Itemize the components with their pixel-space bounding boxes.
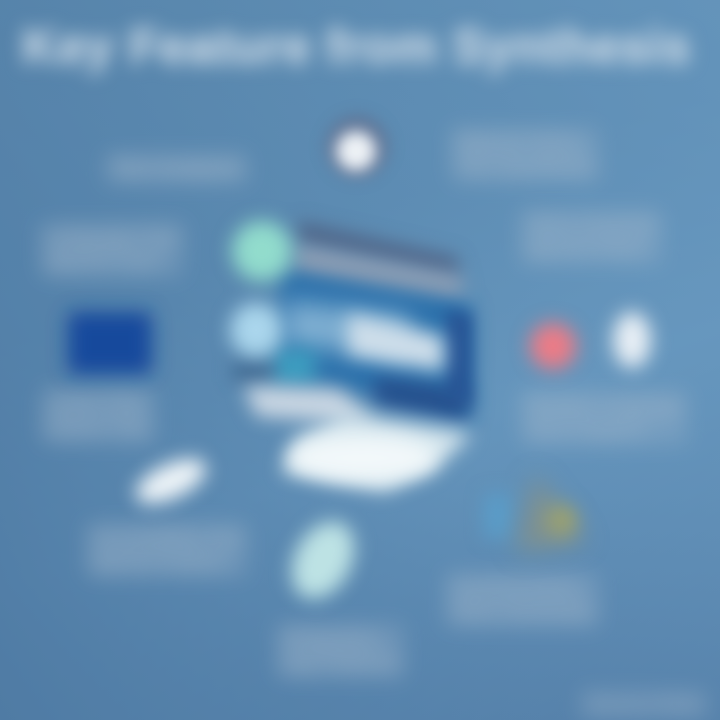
- text block: top centre left: Text Analysis: [110, 157, 243, 180]
- text block: middle right: Voice Support: [525, 420, 646, 440]
- text block: middle left: Export Tool: [46, 418, 150, 439]
- text block: lower left: [87, 523, 247, 577]
- monitor top edge: [298, 222, 458, 276]
- icon: white leaf: [129, 450, 213, 512]
- title: Key Feature from Synthesis: [22, 20, 691, 74]
- icon: red circle: [530, 323, 576, 369]
- white base: [282, 414, 472, 492]
- text block: middle right: [521, 391, 687, 445]
- text block: upper right: [521, 210, 662, 264]
- monitor grey band: [295, 246, 462, 300]
- monitor dark right side: [375, 376, 468, 420]
- screen glow: [285, 300, 410, 358]
- icon: blue and olive shapes: [484, 474, 586, 552]
- text block: upper right: Speech Pitch: [525, 239, 644, 260]
- text block: top right: Text Synthesis: [455, 156, 595, 178]
- icon: white oval: [613, 312, 651, 368]
- text block: middle left: Audio Files: [46, 393, 148, 414]
- text block: lower centre: App Platform: [281, 653, 400, 674]
- icon: blue square: [68, 312, 152, 374]
- text block: upper left: Speech Tool: [45, 252, 157, 273]
- icon: mint leaf: [279, 511, 367, 609]
- text block: middle right: Multiple Language: [525, 395, 683, 415]
- light blue circle: [230, 303, 282, 357]
- text block: lower right: Customization: [450, 577, 581, 598]
- text block: lower right: [446, 573, 599, 627]
- teal accent: [273, 350, 315, 384]
- dark accent: [234, 360, 272, 382]
- text block: upper right: Voice Controls: [525, 214, 658, 235]
- icon: computer monitor: [230, 221, 472, 492]
- text block: lower left: Accessibility Tool: [91, 527, 243, 547]
- text block: bottom right: Source Note: [585, 693, 703, 715]
- text block: upper left: Language Tool: [45, 227, 179, 248]
- keyboard: [244, 386, 376, 424]
- mint circle: [232, 221, 292, 281]
- text block: middle left: [42, 389, 154, 443]
- text block: lower left: Speech Feature: [91, 552, 225, 572]
- text block: lower centre: [277, 624, 404, 678]
- text block: lower right: Voice Generator: [450, 602, 595, 623]
- screen light pane: [348, 314, 444, 372]
- text block: upper left: [41, 223, 183, 277]
- monitor screen: [280, 270, 472, 418]
- text block: top right: [451, 128, 599, 182]
- text block: top right: Natural Voice: [455, 131, 581, 153]
- icon: white circle: [326, 116, 388, 178]
- text block: lower centre: Integration: [281, 628, 379, 649]
